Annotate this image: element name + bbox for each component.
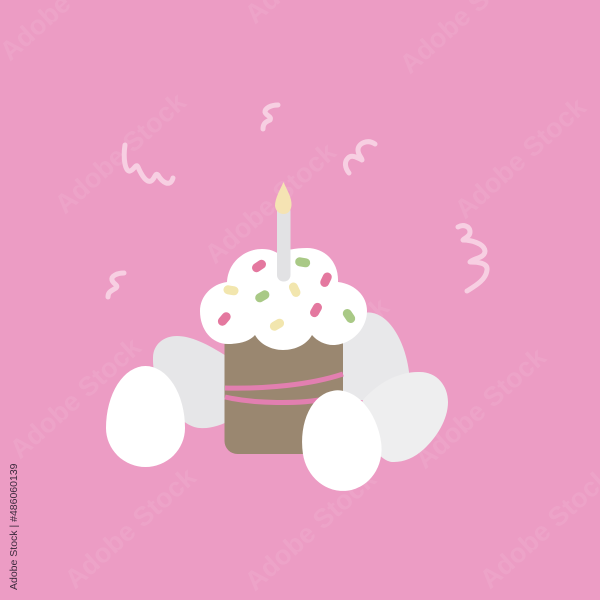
- egg: front right white: [295, 385, 387, 496]
- egg: back right grey: [335, 312, 409, 400]
- illustration: Easter cake with eggs on pink background: Adobe Stock: [59, 461, 202, 594]
- illustration: Easter cake with eggs on pink background: Adobe Stock: [4, 331, 147, 464]
- sprinkles: [222, 262, 351, 326]
- squiggle: left curly: [124, 145, 173, 183]
- illustration: Easter cake with eggs on pink background: Adobe Stock: [252, 291, 395, 424]
- egg: left white: [106, 366, 185, 467]
- egg: back left grey: [153, 336, 240, 428]
- illustration: Easter cake with eggs on pink background: Adobe Stock: [239, 463, 382, 596]
- frosting: [200, 240, 367, 350]
- squiggle: lower left: [108, 273, 124, 297]
- squiggle: right of candle: [345, 142, 375, 173]
- cake ribbon bands: [225, 374, 343, 403]
- illustration: Easter cake with eggs on pink background: Adobe Stock: [49, 86, 192, 219]
- illustration: Easter cake with eggs on pink background: Adobe Stock: [449, 91, 592, 224]
- egg: right grey: [361, 372, 448, 462]
- cake base: [224, 326, 343, 454]
- candle flame: [275, 182, 292, 214]
- squiggle: top centre: [263, 105, 278, 129]
- illustration: Easter cake with eggs on pink background: Adobe Stock: [199, 136, 342, 269]
- credit text: Adobe Stock | #486060139: [8, 463, 20, 590]
- candle: [275, 182, 292, 281]
- illustration: Easter cake with eggs on pink background: Adobe Stock: [409, 341, 552, 474]
- squiggle: far right: [458, 226, 487, 291]
